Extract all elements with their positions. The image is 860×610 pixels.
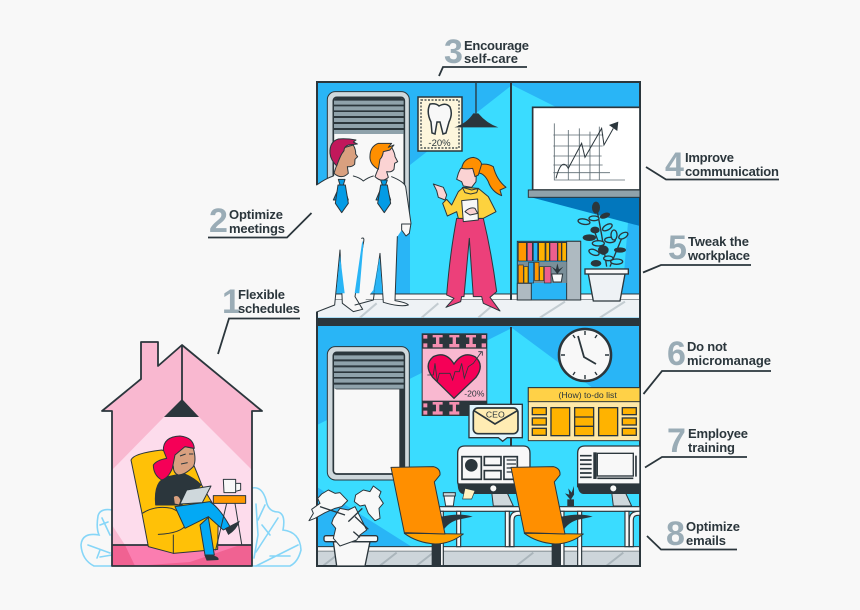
- label 5: tweak the workplace: Tweak the: [688, 234, 749, 249]
- bottom room light: [317, 328, 640, 552]
- top room light: [410, 85, 628, 300]
- label 4: improve communication: Improve: [685, 150, 734, 165]
- label 1: flexible schedules: [218, 283, 300, 354]
- desks: [439, 507, 640, 566]
- label 7: employee training: training: [688, 440, 735, 455]
- label 7: employee training: [645, 422, 748, 468]
- ceiling lamp: [454, 82, 498, 127]
- man with red hair: [330, 139, 358, 200]
- potted plant: [578, 202, 629, 301]
- label 8: optimize emails: Optimize: [686, 519, 740, 534]
- shadow under whiteboard: [530, 197, 640, 226]
- bushes behind the house: [81, 488, 301, 566]
- label 3: encourage self-care: Encourage: [464, 38, 529, 53]
- label 2: optimize meetings: meetings: [229, 221, 285, 236]
- woman pants: [446, 218, 500, 311]
- bottom window: [327, 347, 409, 480]
- label 1: flexible schedules: schedules: [238, 301, 300, 316]
- left computer: [458, 446, 530, 506]
- label 8: optimize emails: 8: [666, 515, 685, 553]
- lower ties: [335, 185, 391, 213]
- whiteboard with growth chart: [528, 107, 640, 197]
- right computer: [578, 446, 640, 506]
- label 1: flexible schedules: 1: [222, 283, 241, 321]
- panel: house with remote worker: [81, 342, 301, 566]
- two men in white shirts: [314, 176, 411, 312]
- label 6: do not micromanage: micromanage: [687, 353, 771, 368]
- men's heads and ties: [330, 139, 398, 200]
- label 4: improve communication: [646, 146, 779, 184]
- label 5: tweak the workplace: 5: [668, 229, 687, 267]
- tooth poster: -20%: [428, 138, 451, 149]
- CEO email notification: CEO: [486, 409, 505, 419]
- floor: [112, 545, 252, 566]
- woman upper body with clipboard: [433, 157, 506, 222]
- floor slab: [317, 318, 640, 326]
- label 6: do not micromanage: Do not: [687, 339, 728, 354]
- how-to list board: [528, 388, 640, 441]
- label 6: do not micromanage: 6: [667, 335, 686, 373]
- label 3: encourage self-care: [439, 33, 529, 76]
- label 1: flexible schedules: Flexible: [238, 287, 285, 302]
- house outline: [102, 342, 262, 566]
- label 7: employee training: 7: [667, 422, 686, 460]
- tooth poster: [418, 97, 462, 151]
- house body: [102, 342, 262, 566]
- wall clock: [559, 329, 611, 381]
- bottom floor: [317, 547, 640, 566]
- how-to list board: (How) to-do list: [559, 390, 617, 400]
- coffee cup and small plant: [443, 486, 576, 506]
- man with orange hair: [370, 143, 398, 200]
- monstera plant: [309, 486, 383, 566]
- label 2: optimize meetings: Optimize: [229, 207, 283, 222]
- armchair and worker: [131, 436, 246, 561]
- label 8: optimize emails: emails: [686, 533, 726, 548]
- house lamp: [164, 399, 199, 417]
- label 8: optimize emails: [647, 515, 740, 553]
- heart poster: -20%: [464, 389, 485, 399]
- panel: office building: [309, 82, 640, 566]
- top room wall: [317, 82, 640, 318]
- label 5: tweak the workplace: workplace: [687, 248, 750, 263]
- label 2: optimize meetings: 2: [209, 202, 228, 240]
- bottom room wall: [317, 326, 640, 566]
- top window: [327, 92, 409, 225]
- left orange chair: [391, 467, 473, 566]
- top floor: [317, 294, 640, 318]
- label 3: encourage self-care: 3: [444, 33, 463, 71]
- label 7: employee training: Employee: [688, 426, 748, 441]
- bookshelf: [517, 241, 581, 300]
- CEO email notification: [469, 404, 522, 441]
- building outline and dividers: [317, 82, 640, 566]
- label 3: encourage self-care: self-care: [464, 51, 518, 66]
- right orange chair: [511, 467, 593, 566]
- lamp light: [112, 417, 252, 545]
- label 2: optimize meetings: [208, 202, 312, 240]
- label 6: do not micromanage: [644, 335, 771, 394]
- label 4: improve communication: communication: [685, 164, 779, 179]
- label 4: improve communication: 4: [665, 146, 684, 184]
- heart poster: [422, 333, 487, 416]
- label 5: tweak the workplace: [643, 229, 751, 272]
